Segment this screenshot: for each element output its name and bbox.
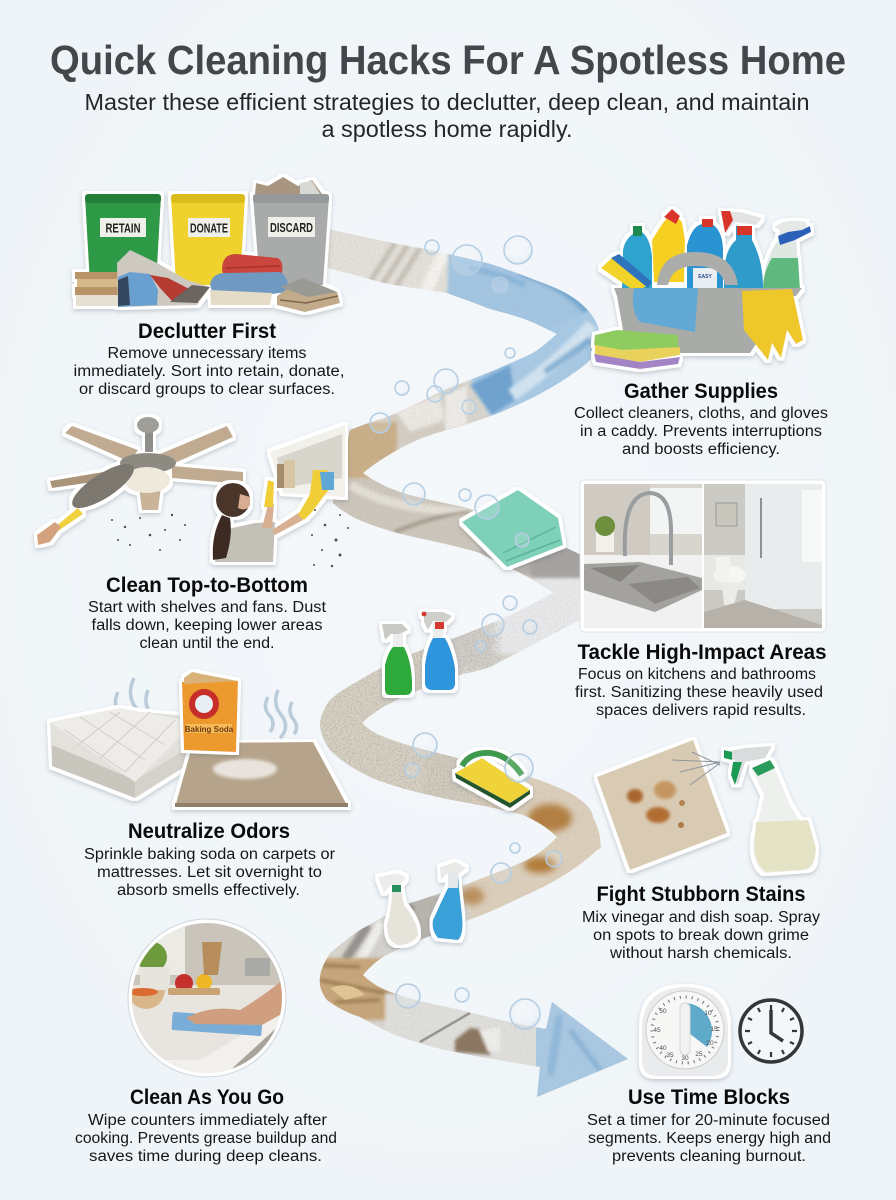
- body text: prevents cleaning burnout.: [612, 1148, 806, 1165]
- title: Quick Cleaning Hacks For A Spotless Home: [50, 37, 846, 83]
- body text: [582, 909, 820, 962]
- body text: absorb smells effectively.: [117, 882, 300, 899]
- icon: small spray bottles: [378, 862, 466, 945]
- body text: [575, 666, 823, 719]
- icon: wall clock: [740, 1000, 802, 1062]
- winding ribbon path with arrow: [320, 230, 628, 1097]
- panel: neutralize odors: [50, 672, 348, 899]
- photo: kitchen sink and bathroom: [580, 480, 826, 632]
- body text: [88, 599, 327, 652]
- icon: ceiling fan and duster: [37, 417, 243, 545]
- icon: baking soda box: [182, 672, 238, 752]
- icon: mattress: [50, 708, 200, 798]
- subtitle: Master these efficient strategies to declutter, deep clean, and maintain: [84, 89, 810, 115]
- heading: Gather Supplies: [624, 380, 778, 403]
- body text: immediately. Sort into retain, donate,: [74, 363, 344, 380]
- icon: sorting bins and piles: DISCARD: [270, 220, 313, 235]
- icon: kitchen timer: 15: [710, 1026, 718, 1033]
- icon: scrub brush: [455, 753, 530, 808]
- icon: kitchen timer: 45: [653, 1027, 661, 1034]
- heading: Clean Top-to-Bottom: [106, 574, 308, 597]
- body text: [84, 846, 335, 899]
- icon: sorting bins and piles: [75, 177, 340, 312]
- panel: clean top-to-bottom: [37, 417, 349, 652]
- body text: in a caddy. Prevents interruptions: [580, 423, 822, 440]
- icon: spray lines: [672, 752, 720, 785]
- heading: Fight Stubborn Stains: [596, 883, 806, 906]
- icon: cleaning caddy: EASY: [698, 274, 712, 280]
- icon: baking soda box: Baking Soda: [185, 725, 234, 734]
- body text: first. Sanitizing these heavily used: [575, 684, 823, 701]
- body text: Sprinkle baking soda on carpets or: [84, 846, 335, 863]
- heading: Tackle High-Impact Areas: [578, 641, 826, 664]
- body text: Remove unnecessary items: [108, 345, 307, 362]
- body text: [587, 1112, 831, 1165]
- body text: falls down, keeping lower areas: [92, 617, 323, 634]
- icon: stained cloth: [597, 740, 727, 870]
- icon: woman wiping shelf: [213, 425, 345, 562]
- body text: Mix vinegar and dish soap. Spray: [582, 909, 820, 926]
- icon: kitchen timer: 35: [666, 1052, 674, 1059]
- icon: vinegar spray bottle: [724, 746, 816, 873]
- panel: tackle high-impact areas: [575, 480, 826, 719]
- body text: Start with shelves and fans. Dust: [88, 599, 327, 616]
- body text: Set a timer for 20-minute focused: [587, 1112, 830, 1129]
- panel: use time blocks: [587, 987, 831, 1165]
- body text: [574, 405, 828, 458]
- subtitle: a spotless home rapidly.: [322, 116, 572, 142]
- heading: Declutter First: [138, 320, 276, 343]
- panel: clean as you go: [75, 919, 337, 1165]
- body text: Focus on kitchens and bathrooms: [578, 666, 816, 683]
- body text: cooking. Prevents grease buildup and: [75, 1130, 337, 1147]
- body text: or discard groups to clear surfaces.: [79, 381, 335, 398]
- heading: Clean As You Go: [130, 1086, 284, 1109]
- body text: Collect cleaners, cloths, and gloves: [574, 405, 828, 422]
- body text: mattresses. Let sit overnight to: [97, 864, 322, 881]
- body text: Wipe counters immediately after: [88, 1112, 327, 1129]
- icon: kitchen timer: 40: [659, 1045, 667, 1052]
- icon: carpet with baking soda: [175, 742, 348, 807]
- subtitle: [84, 89, 810, 142]
- icon: kitchen timer: [642, 987, 728, 1076]
- icon: kitchen timer: 50: [659, 1008, 667, 1015]
- icon: teal microfiber cloth: [462, 490, 563, 567]
- heading: Neutralize Odors: [128, 820, 290, 843]
- soap bubbles: [370, 236, 562, 1029]
- body text: on spots to break down grime: [593, 927, 809, 944]
- panel: declutter first: [74, 177, 344, 398]
- body text: clean until the end.: [140, 635, 274, 652]
- icon: sorting bins and piles: RETAIN: [106, 220, 140, 236]
- icon: kitchen timer: 10: [704, 1010, 712, 1017]
- icon: odor wavy lines: [115, 678, 296, 738]
- photo: wiping the counter: [125, 919, 290, 1085]
- body text: [75, 1112, 337, 1165]
- icon: kitchen timer: 20: [706, 1040, 714, 1047]
- icon: cleaning caddy: [594, 209, 811, 369]
- body text: segments. Keeps energy high and: [588, 1130, 831, 1147]
- icon: kitchen timer: 25: [695, 1051, 703, 1058]
- panel: fight stubborn stains: [582, 740, 820, 962]
- dust particles: [111, 509, 349, 567]
- body text: without harsh chemicals.: [609, 945, 792, 962]
- heading: Use Time Blocks: [628, 1086, 790, 1109]
- panel: gather supplies: [574, 209, 828, 458]
- body text: saves time during deep cleans.: [89, 1148, 322, 1165]
- body text: [74, 345, 344, 398]
- icon: kitchen timer: 30: [681, 1055, 689, 1062]
- icon: sorting bins and piles: DONATE: [190, 220, 228, 236]
- icon: green and blue spray bottles: [382, 612, 455, 695]
- body text: spaces delivers rapid results.: [596, 702, 806, 719]
- body text: and boosts efficiency.: [622, 441, 780, 458]
